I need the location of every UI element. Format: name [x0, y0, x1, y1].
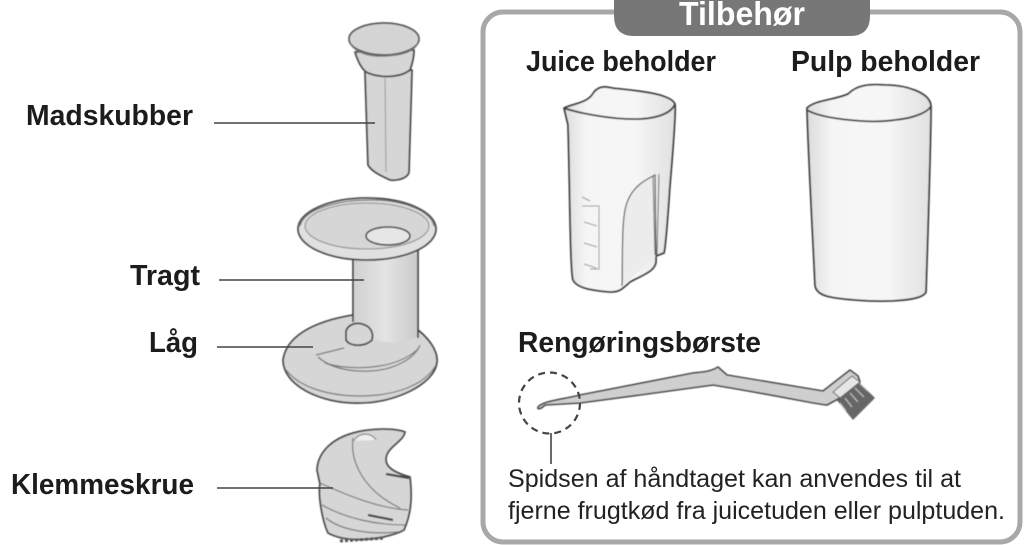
callout: dashed circle on handle tip [519, 372, 580, 464]
icon: juice jug [564, 87, 675, 292]
label: Pulp beholder: Pulp beholder [791, 45, 980, 77]
icon: food pusher [349, 23, 419, 180]
text block: handle tip usage note [508, 465, 1005, 525]
icon: pulp container [807, 85, 931, 301]
icon: funnel and lid [283, 198, 437, 403]
label: Låg: Låg [149, 326, 198, 358]
label: Madskubber: Madskubber [26, 99, 193, 131]
label: Rengøringsbørste: Rengøringsbørste [518, 326, 761, 358]
icon: squeezing screw [317, 429, 411, 541]
panel: Tilbehør accessories [483, 0, 1020, 542]
label: Klemmeskrue: Klemmeskrue [11, 468, 194, 500]
label: Tragt: Tragt [130, 259, 201, 291]
icon: cleaning brush [538, 367, 875, 420]
text block: handle tip usage note: fjerne frugtkød fra juicetuden eller pulptuden. [508, 497, 1005, 525]
label: Juice beholder: Juice beholder [526, 45, 716, 77]
heading: Tilbehør [614, 0, 870, 36]
text block: handle tip usage note: Spidsen af håndtaget kan anvendes til at [508, 465, 961, 493]
